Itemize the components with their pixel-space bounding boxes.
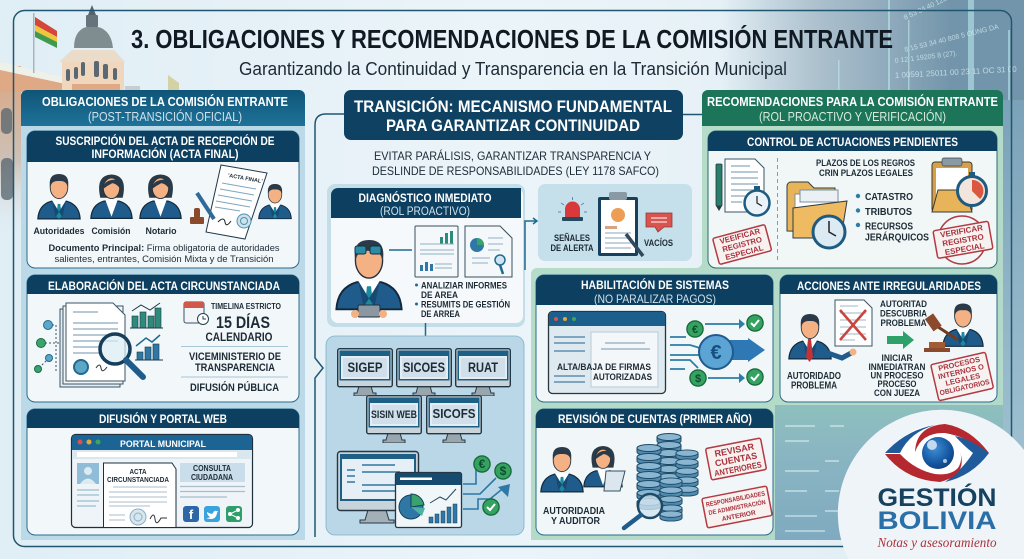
icon: flujos de pago bbox=[463, 456, 511, 515]
icon: flujos de pago: $ bbox=[500, 464, 507, 478]
monitor: SIGEP bbox=[338, 349, 392, 396]
icon: ojo bbox=[885, 424, 989, 482]
text: iniciar proceso: CON JUEZA bbox=[874, 388, 920, 398]
monitor: SISIN WEB: SISIN WEB bbox=[371, 409, 417, 421]
monitor: SIGEP: SIGEP bbox=[348, 360, 382, 375]
stamp: verificar registro: VEEIFICAR bbox=[719, 226, 762, 246]
icon: vacíos: VACÍOS bbox=[644, 238, 673, 248]
icon: calendario bbox=[184, 302, 208, 324]
panel: diagnóstico inmediato bbox=[327, 184, 525, 327]
text: plazo: 15 DÍAS bbox=[216, 313, 270, 332]
icon: flujos de pago: € bbox=[479, 457, 486, 471]
icon: vacíos bbox=[644, 213, 673, 248]
browser: portal municipal: PORTAL MUNICIPAL bbox=[120, 439, 206, 450]
text: plazos bbox=[816, 158, 915, 178]
icon: juez con mazo bbox=[924, 304, 983, 352]
list: tareas de diagnóstico: ANALIZIAR INFORMES bbox=[421, 280, 507, 290]
text: plazos: CRIN PLAZOS LEGALES bbox=[819, 168, 913, 178]
connector: diagnóstico to alerta bbox=[525, 218, 537, 270]
card: suscripción del acta: SUSCRIPCIÓN DEL ACTA DE RECEPCIÓN DE bbox=[56, 135, 275, 148]
text: evitar parálisis: EVITAR PARÁLISIS, GARANTIZAR TRANSPARENCIA Y bbox=[374, 148, 651, 163]
text: autoridad descubría problema: DESCUBRIA bbox=[880, 308, 927, 318]
card: suscripción del acta: salientes, entrantes, Comisión Mixta y de Transición bbox=[54, 254, 274, 264]
wordmark: Notas y asesoramiento bbox=[877, 536, 996, 551]
subtitle: Garantizando la Continuidad y Transparencia en la Transición Municipal bbox=[239, 58, 787, 79]
icon: portapapeles con cronómetro bbox=[932, 158, 986, 212]
list: catastro, tributos, recursos: TRIBUTOS bbox=[865, 206, 912, 218]
stamp: verificar registro: REGISTRO bbox=[721, 235, 763, 254]
stamp: responsabilidades: DE ADMINISTRACIÓN bbox=[708, 497, 767, 517]
wordmark: BOLIVIA bbox=[878, 507, 996, 535]
stamp: responsabilidades: ANTERIOR bbox=[721, 510, 757, 523]
icon: documento con lupa bbox=[34, 303, 143, 387]
text: plazos: PLAZOS DE LOS REGROS bbox=[816, 158, 915, 168]
panel: diagnóstico inmediato: DIAGNÓSTICO INMEDIATO bbox=[358, 192, 492, 205]
stamp: revisar cuentas: CUENTAS bbox=[714, 450, 758, 468]
panel: diagnóstico inmediato: (ROL PROACTIVO) bbox=[380, 206, 470, 218]
panel: recomendaciones bbox=[531, 90, 1003, 540]
panel heading: obligaciones: (POST-TRANSICIÓN OFICIAL) bbox=[88, 109, 242, 124]
monitor: RUAT: RUAT bbox=[468, 360, 499, 375]
text: iniciar proceso: UN PROCESO bbox=[870, 370, 924, 380]
icon: flujo de pagos bbox=[670, 315, 765, 386]
stamp: procesos internos: OBLIGATORIOS bbox=[939, 377, 991, 397]
stamp: procesos internos: PROCESOS bbox=[937, 355, 981, 373]
icon: notario bbox=[140, 174, 181, 218]
labels: personas: Comisión bbox=[92, 226, 130, 236]
stamp: responsabilidades: RESPONSABILIDADES bbox=[705, 490, 766, 509]
list: catastro, tributos, recursos: RECURSOS bbox=[865, 220, 913, 232]
background: digital data glow bbox=[720, 0, 1024, 559]
logo: Gestión Bolivia bbox=[838, 410, 1024, 559]
list: tareas de diagnóstico: DE ARREA bbox=[421, 309, 460, 319]
text: iniciar proceso: INMEDIATRAN bbox=[868, 362, 926, 372]
icon: pilas de monedas bbox=[624, 434, 698, 528]
panel: señales de alerta bbox=[538, 184, 692, 261]
title: 3. OBLIGACIONES Y RECOMENDACIONES DE LA COMISIÓN ENTRANTE bbox=[131, 24, 893, 54]
stamp: procesos internos: LEGALES bbox=[945, 371, 981, 388]
text: iniciar proceso bbox=[868, 353, 926, 398]
icon: ventana de firmas: AUTORIZADAS bbox=[593, 372, 652, 382]
monitor: SICOFS bbox=[427, 396, 481, 443]
panel heading: obligaciones: OBLIGACIONES DE LA COMISIÓN ENTRANTE bbox=[42, 94, 288, 109]
icon: flujo de pagos: € bbox=[710, 342, 722, 364]
icon: documento acta final: 'ACTA FINAL' bbox=[227, 173, 264, 185]
icon: redes sociales bbox=[183, 506, 242, 522]
icon: ventana de firmas bbox=[548, 312, 666, 394]
card: suscripción del acta bbox=[27, 131, 299, 268]
icon: documento acta final bbox=[190, 165, 267, 239]
text: plazo: TRANSPARENCIA bbox=[195, 362, 275, 374]
panel heading: recomendaciones: (ROL PROACTIVO Y VERIFICACIÓN) bbox=[759, 109, 946, 124]
connector: left bracket bbox=[315, 114, 344, 537]
text: iniciar proceso: INICIAR bbox=[882, 353, 913, 363]
labels: personas bbox=[34, 226, 177, 236]
label: señales de alerta: DE ALERTA bbox=[550, 243, 594, 253]
panel heading: obligaciones bbox=[21, 90, 305, 126]
monitor: SISIN WEB bbox=[367, 396, 421, 443]
card: acciones ante irregularidades bbox=[780, 275, 997, 402]
label: autoridad problema: PROBLEMA bbox=[791, 380, 837, 392]
card: revisión de cuentas bbox=[536, 409, 773, 535]
labels: personas: Notario bbox=[146, 226, 177, 236]
browser: portal municipal: CIUDADANA bbox=[191, 473, 233, 482]
icon: equipo con panel de datos bbox=[338, 452, 462, 528]
monitor: RUAT bbox=[456, 349, 510, 396]
stamp: verificar registro: ESPECIAL bbox=[724, 243, 765, 262]
chart: barras bbox=[130, 303, 163, 360]
icon: documento rechazado bbox=[835, 300, 872, 346]
text: plazo: VICEMINISTERIO DE bbox=[189, 351, 281, 363]
card: suscripción del acta: INFORMACIÓN (ACTA FINAL) bbox=[92, 148, 239, 161]
browser: portal municipal bbox=[72, 434, 252, 528]
heading: transición: TRANSICIÓN: MECANISMO FUNDAMENTAL bbox=[354, 97, 672, 116]
stamp: revisar cuentas: ANTERIORES bbox=[713, 459, 763, 478]
connector: to right panel bbox=[683, 114, 702, 116]
icon: analista con gafas bbox=[336, 240, 412, 318]
list: catastro, tributos, recursos: CATASTRO bbox=[865, 191, 913, 203]
text: autoridad descubría problema: AUTORITAD bbox=[880, 299, 927, 309]
panel heading: recomendaciones: RECOMENDACIONES PARA LA COMISIÓN ENTRANTE bbox=[707, 94, 998, 109]
stamp: verificar registro bbox=[713, 224, 772, 265]
list: catastro, tributos, recursos bbox=[856, 191, 929, 244]
card: difusión y portal web bbox=[27, 409, 299, 535]
list: tareas de diagnóstico bbox=[415, 280, 510, 319]
browser: portal municipal: CIRCUNSTANCIADA bbox=[107, 475, 169, 484]
text: plazo: CALENDARIO bbox=[206, 330, 272, 344]
icon: comisión bbox=[91, 174, 132, 218]
stamp: revisar cuentas: REVISAR bbox=[714, 441, 755, 459]
icon: autoridad y auditora bbox=[541, 446, 625, 492]
label: autoridad problema: AUTORIDADO bbox=[787, 371, 841, 382]
card: habilitación de sistemas: (NO PARALIZAR PAGOS) bbox=[594, 292, 716, 306]
browser: portal municipal: CONSULTA bbox=[193, 464, 231, 473]
icon: sirena bbox=[558, 197, 587, 221]
label: señales de alerta bbox=[550, 233, 594, 253]
background: digital data glow: 1 00591 25011 00 23 11 OC 31 00 bbox=[895, 65, 1018, 80]
icon: firmante bbox=[259, 184, 291, 219]
stamp: verificar registro especial: ESPECIAL bbox=[944, 241, 985, 257]
stamp: verificar registro especial bbox=[931, 211, 995, 268]
label: autoridad problema bbox=[787, 371, 841, 392]
wordmark bbox=[877, 482, 996, 551]
stamp: procesos internos: INTERNOS O bbox=[937, 362, 985, 381]
card: acciones ante irregularidades: ACCIONES ANTE IRREGULARIDADES bbox=[797, 281, 981, 293]
panel heading: recomendaciones bbox=[702, 90, 1003, 126]
label: autoridad y auditor: Y AUDITOR bbox=[551, 516, 600, 527]
stamp: verificar registro especial: VERIFICAR bbox=[939, 223, 984, 240]
icon: flujo de pagos: $ bbox=[695, 373, 701, 385]
card: control de actuaciones bbox=[708, 131, 997, 268]
icon: informes bbox=[415, 226, 512, 277]
monitor: SICOES bbox=[397, 349, 451, 396]
card: habilitación de sistemas: HABILITACIÓN DE SISTEMAS bbox=[581, 278, 729, 292]
icon: redes sociales: f bbox=[189, 507, 194, 522]
list: catastro, tributos, recursos: JERÁRQUICOS bbox=[865, 230, 929, 244]
text: documento principal: Documento Principal: Firma obligatoria de autoridades bbox=[48, 243, 280, 253]
card: habilitación de sistemas bbox=[536, 275, 773, 402]
monitor: SICOFS: SICOFS bbox=[432, 406, 476, 421]
text: evitar parálisis bbox=[372, 148, 659, 178]
list: tareas de diagnóstico: DE AREA bbox=[421, 290, 458, 300]
stamp: revisar cuentas bbox=[705, 438, 767, 480]
text: plazo: DIFUSIÓN PÚBLICA bbox=[190, 381, 279, 394]
label: autoridad y auditor bbox=[543, 506, 605, 527]
panel: sistemas bbox=[326, 336, 524, 535]
card: elaboración del acta bbox=[27, 275, 299, 402]
text: iniciar proceso: PROCESO bbox=[878, 379, 916, 389]
icon: autoridades bbox=[38, 174, 80, 219]
text: autoridad descubría problema: PROBLEMA bbox=[880, 318, 927, 328]
text: plazo: TIMELINA ESTRICTO bbox=[211, 302, 281, 311]
background: digital data glow: 8 15 53 34 40 808 5 OUNG DA bbox=[904, 24, 1000, 54]
text: evitar parálisis: DESLINDE DE RESPONSABILIDADES (LEY 1178 SAFCO) bbox=[372, 164, 659, 178]
list: tareas de diagnóstico: RESUMITS DE GESTIÓN bbox=[421, 298, 510, 310]
background: digital data glow: 0 12 1 19205 8 (27). bbox=[894, 50, 958, 65]
icon: autoridad señalando bbox=[789, 314, 856, 362]
icon: carpeta con reloj bbox=[787, 182, 847, 248]
card: revisión de cuentas: REVISIÓN DE CUENTAS (PRIMER AÑO) bbox=[558, 412, 752, 426]
icon: flujo de pagos: € bbox=[692, 324, 698, 336]
heading: transición: PARA GARANTIZAR CONTINUIDAD bbox=[386, 117, 640, 135]
icon: portapapeles bbox=[598, 192, 643, 256]
heading: transición bbox=[344, 90, 683, 140]
text: plazo bbox=[181, 302, 288, 394]
stamp: responsabilidades bbox=[702, 486, 772, 528]
card: control de actuaciones: CONTROL DE ACTUACIONES PENDIENTES bbox=[747, 137, 958, 149]
card: elaboración del acta: ELABORACIÓN DEL ACTA CIRCUNSTANCIADA bbox=[48, 280, 280, 293]
card: difusión y portal web: DIFUSIÓN Y PORTAL WEB bbox=[99, 413, 227, 426]
text: autoridad descubría problema bbox=[880, 299, 927, 328]
browser: portal municipal: ACTA bbox=[130, 467, 147, 476]
background: government palace with dome and flag bbox=[0, 5, 179, 236]
arrow: iniciar proceso bbox=[887, 331, 914, 349]
wordmark: GESTIÓN bbox=[878, 482, 996, 512]
icon: documento y cronómetro bbox=[716, 159, 770, 216]
stamp: procesos internos bbox=[931, 352, 994, 401]
monitor: SICOES: SICOES bbox=[403, 360, 445, 375]
label: autoridad y auditor: AUTORIDADIA bbox=[543, 506, 605, 517]
labels: personas: Autoridades bbox=[34, 226, 84, 236]
panel: obligaciones bbox=[21, 90, 305, 540]
icon: ventana de firmas: ALTA/BAJA DE FIRMAS bbox=[557, 362, 651, 372]
stamp: verificar registro especial: REGISTRO bbox=[942, 232, 984, 248]
label: señales de alerta: SEÑALES bbox=[554, 233, 590, 243]
